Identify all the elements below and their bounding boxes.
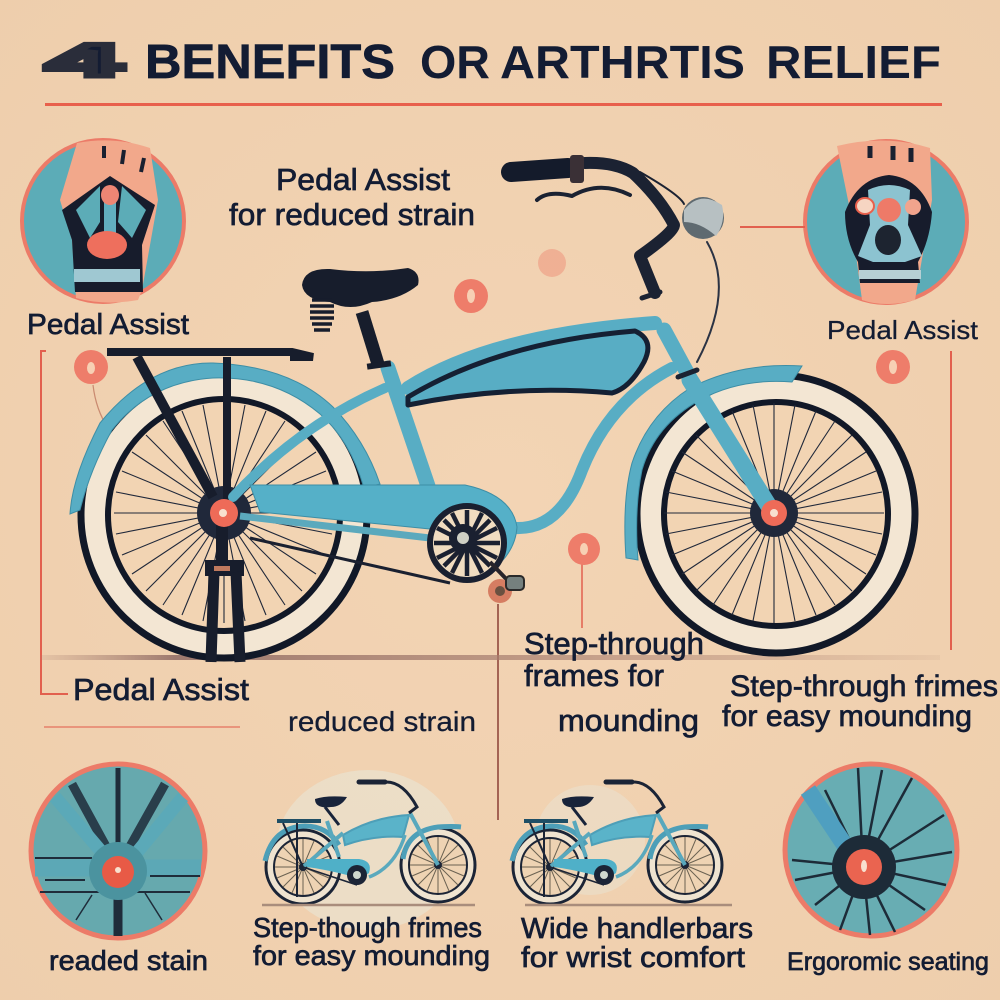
headlight xyxy=(682,197,724,239)
label: step-through right: for easy mounding xyxy=(722,700,972,733)
title xyxy=(47,34,941,89)
label: step-through frimes bottom: Step-though frimes xyxy=(253,912,482,943)
label: step-through right: Step-through frimes xyxy=(730,670,998,703)
label: step-through frimes bottom xyxy=(253,912,490,971)
title: OR xyxy=(420,36,490,88)
label: step-through right xyxy=(722,670,998,733)
label: pedal assist lower left: Pedal Assist xyxy=(73,672,249,707)
front fender xyxy=(625,365,802,560)
label: ergonomic seating: Ergoromic seating xyxy=(787,948,989,976)
label: step-through centre: mounding xyxy=(558,703,699,738)
main bicycle xyxy=(40,155,940,662)
label: wide handlebars: Wide handlerbars xyxy=(521,913,753,945)
label: wide handlebars xyxy=(521,913,753,974)
lower frame and chain guard xyxy=(250,485,517,560)
rear fender xyxy=(70,363,380,514)
icon: hub detail, bottom left xyxy=(31,764,205,938)
text: pedal assist for reduced strain: Pedal Assist xyxy=(276,162,450,197)
callout lines xyxy=(41,227,951,820)
kickstand xyxy=(205,520,244,662)
chain xyxy=(250,538,450,583)
mini bike two xyxy=(512,782,732,905)
label: readed stain: readed stain xyxy=(49,945,208,976)
label: step-through frimes bottom: for easy mounding xyxy=(253,940,490,971)
saddle xyxy=(302,268,419,370)
frame xyxy=(233,323,770,528)
label: step-through centre: Step-through xyxy=(524,626,704,661)
text: pedal assist for reduced strain xyxy=(229,162,475,232)
handlebars xyxy=(511,155,719,377)
label: step-through centre xyxy=(524,626,704,738)
title: 4 xyxy=(47,34,122,86)
title: RELIEF xyxy=(766,36,941,88)
front wheel xyxy=(637,375,915,653)
mini bike one xyxy=(262,770,475,930)
label: pedal assist right: Pedal Assist xyxy=(827,315,979,345)
icon: wrist brace, top left xyxy=(22,140,184,303)
ground shadow xyxy=(40,655,940,660)
title: ARTHRTIS xyxy=(500,36,745,88)
chainring and crank xyxy=(430,506,524,603)
icon: hub detail, bottom right xyxy=(785,764,957,936)
hub caps xyxy=(210,499,787,527)
label: pedal assist left: Pedal Assist xyxy=(27,309,189,341)
label: wide handlebars: for wrist comfort xyxy=(521,942,745,974)
battery tank xyxy=(408,331,648,405)
label: reduced strain: reduced strain xyxy=(288,706,476,737)
chain stay xyxy=(240,516,430,538)
icon: wrist brace, top right xyxy=(805,140,967,304)
rear rack xyxy=(107,352,313,502)
rear wheel xyxy=(81,372,367,658)
text: pedal assist for reduced strain: for reduced strain xyxy=(229,197,475,232)
title: BENEFITS xyxy=(145,36,395,89)
label: step-through centre: frames for xyxy=(524,658,664,693)
callout dots xyxy=(74,249,910,565)
title rule xyxy=(45,103,942,106)
